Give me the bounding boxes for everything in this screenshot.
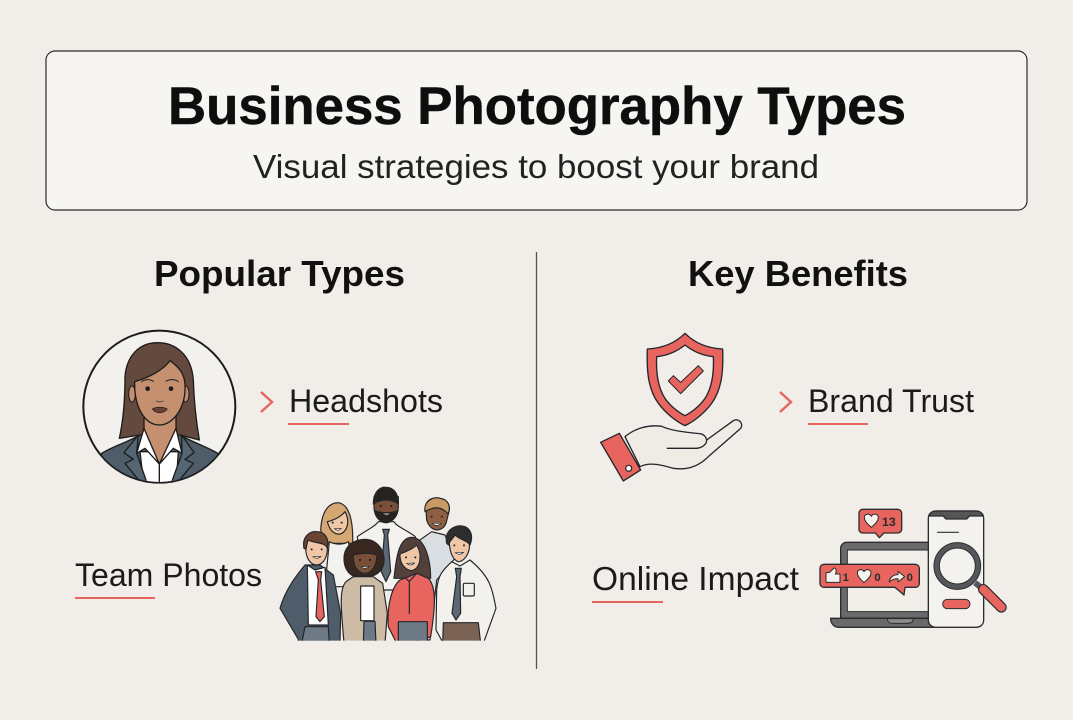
person: back left woman: [321, 503, 357, 587]
person: back center man: [357, 487, 415, 590]
hand: [601, 420, 742, 481]
label: headshots: Headshots: [289, 383, 443, 419]
magnifying glass: [934, 543, 1001, 607]
reaction bubble: heart count: [859, 509, 902, 538]
title: Business Photography Types: [168, 77, 906, 136]
icon: team photo group: [280, 487, 496, 643]
label: brand trust: Brand Trust: [808, 383, 974, 419]
shield: [647, 333, 723, 426]
icon: shield on open hand: [601, 333, 742, 481]
label: team photos: Team Photos: [75, 557, 262, 593]
icon: laptop phone and social reactions: [820, 509, 1001, 627]
person: back right man: [417, 498, 455, 640]
reaction bubble: like heart share counts: 1: [843, 572, 849, 584]
reaction bubble: like heart share counts: [820, 564, 919, 595]
person: front right woman in red blouse: [388, 537, 434, 643]
icon: headshot portrait: [83, 331, 235, 487]
phone: [928, 511, 984, 627]
reaction bubble: heart count: 13: [882, 515, 896, 529]
person: left man in suit: [280, 532, 341, 643]
person: right man with tie: [436, 526, 496, 643]
label: online impact: Online Impact: [592, 560, 799, 597]
laptop: [831, 542, 933, 627]
title panel: [46, 51, 1027, 210]
arrow: brand trust: [780, 392, 791, 412]
reaction bubble: like heart share counts: 0: [874, 572, 881, 584]
heading: popular types: Popular Types: [154, 253, 405, 294]
arrow: headshots: [261, 392, 272, 412]
heading: key benefits: Key Benefits: [688, 253, 908, 294]
subtitle: Visual strategies to boost your brand: [253, 148, 819, 185]
reaction bubble: like heart share counts: 0: [907, 572, 913, 584]
person: front center woman in beige: [341, 539, 387, 643]
